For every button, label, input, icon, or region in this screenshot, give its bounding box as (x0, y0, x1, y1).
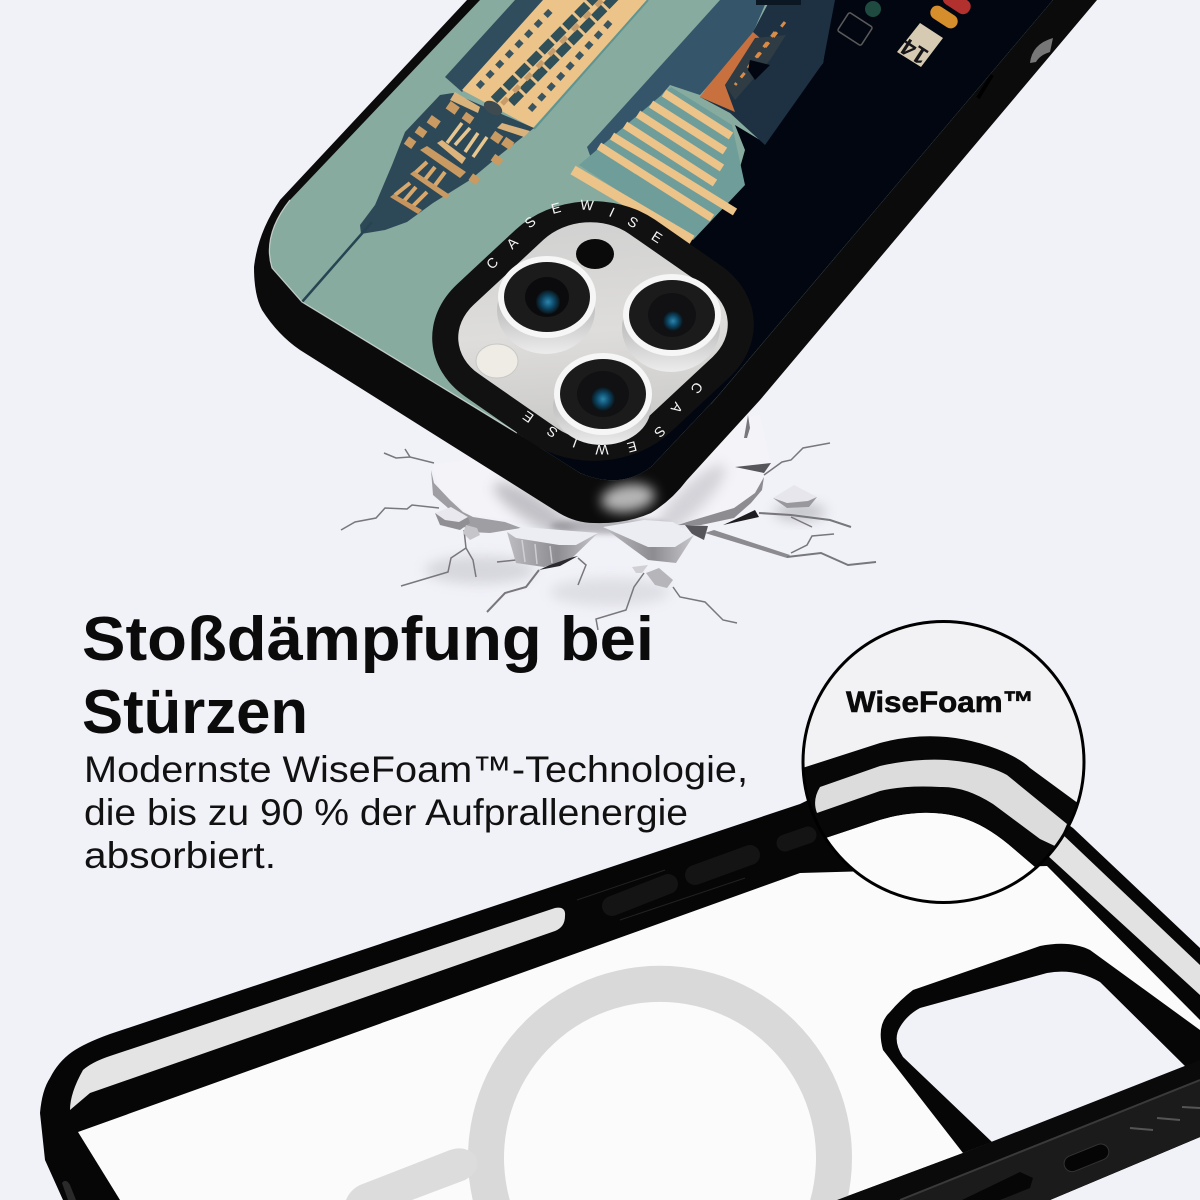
lens 3 (553, 353, 652, 445)
screen artwork (250, 0, 1070, 490)
side slit right (1047, 832, 1200, 995)
brand text on camera ring: E (549, 199, 563, 217)
building: column shadow (587, 0, 765, 156)
brand text on camera ring: W (580, 196, 595, 214)
building: tower shadow (445, 0, 545, 92)
camera bumper ring (392, 168, 794, 494)
brand text on camera ring: E (520, 408, 536, 426)
brand text on camera ring: A (667, 400, 686, 417)
sticker tags: 14 (896, 32, 933, 70)
case frame (40, 736, 1200, 1200)
brand text on camera ring: W (595, 442, 609, 458)
side slit left (70, 908, 565, 1110)
small rock chunks (435, 485, 817, 588)
brand text on camera ring: I (607, 204, 617, 220)
body text: absorbiert. (84, 835, 276, 876)
brand text on camera ring: E (625, 438, 639, 456)
camera cutout (881, 944, 1200, 1153)
building: orange dark block (700, 0, 835, 145)
magnifier circle: WiseFoam detail (802, 620, 1086, 904)
body text: Modernste WiseFoam™-Technologie, (84, 749, 748, 790)
screen edge highlight (269, 200, 517, 433)
magnifier outline (803, 622, 1084, 902)
microphone hole (576, 239, 614, 269)
heading: Stoßdämpfung bei (82, 605, 654, 674)
case clear back (78, 866, 1200, 1200)
brand text on camera ring: S (521, 213, 539, 231)
lens 2 (622, 274, 721, 372)
building: tower crown and spire (302, 92, 534, 302)
navy night area (515, 0, 1053, 490)
body text: die bis zu 90 % der Aufprallenergie (84, 792, 688, 833)
cracked ground illustration (341, 415, 876, 630)
side buttons (577, 835, 808, 920)
building: striped (573, 87, 745, 240)
brand text on camera ring: C (688, 379, 706, 397)
transparent case, open view (40, 736, 1200, 1200)
magnifier label: WiseFoam™ (846, 686, 1034, 719)
sticker tags (837, 0, 973, 70)
heading: Stürzen (82, 678, 308, 747)
flash (476, 344, 518, 378)
lower frame edge (837, 1060, 1200, 1200)
brand text on camera ring: S (625, 213, 641, 231)
body text (84, 749, 748, 876)
magnetic alignment pill (346, 1148, 477, 1200)
magnetic ring (468, 966, 852, 1200)
brand text on camera ring: A (503, 234, 521, 252)
brand text on camera ring: I (570, 435, 580, 451)
camera module (392, 168, 794, 494)
brand text on camera ring: E (649, 228, 665, 246)
brand text on camera ring: S (651, 423, 669, 441)
brand text on camera ring: S (544, 423, 560, 441)
port and speaker openings (62, 1107, 1200, 1200)
phone with pixel-art case, falling (250, 0, 1097, 523)
magnified case corner (804, 736, 1076, 901)
building: tower (462, 0, 648, 129)
phone bumper (254, 0, 1097, 523)
lens 1 (497, 256, 596, 354)
heading (82, 605, 654, 747)
rock chunk left (507, 527, 598, 567)
brand text on camera ring (483, 196, 706, 458)
brand text on camera ring: C (483, 254, 501, 272)
rock chunk right (603, 520, 694, 563)
